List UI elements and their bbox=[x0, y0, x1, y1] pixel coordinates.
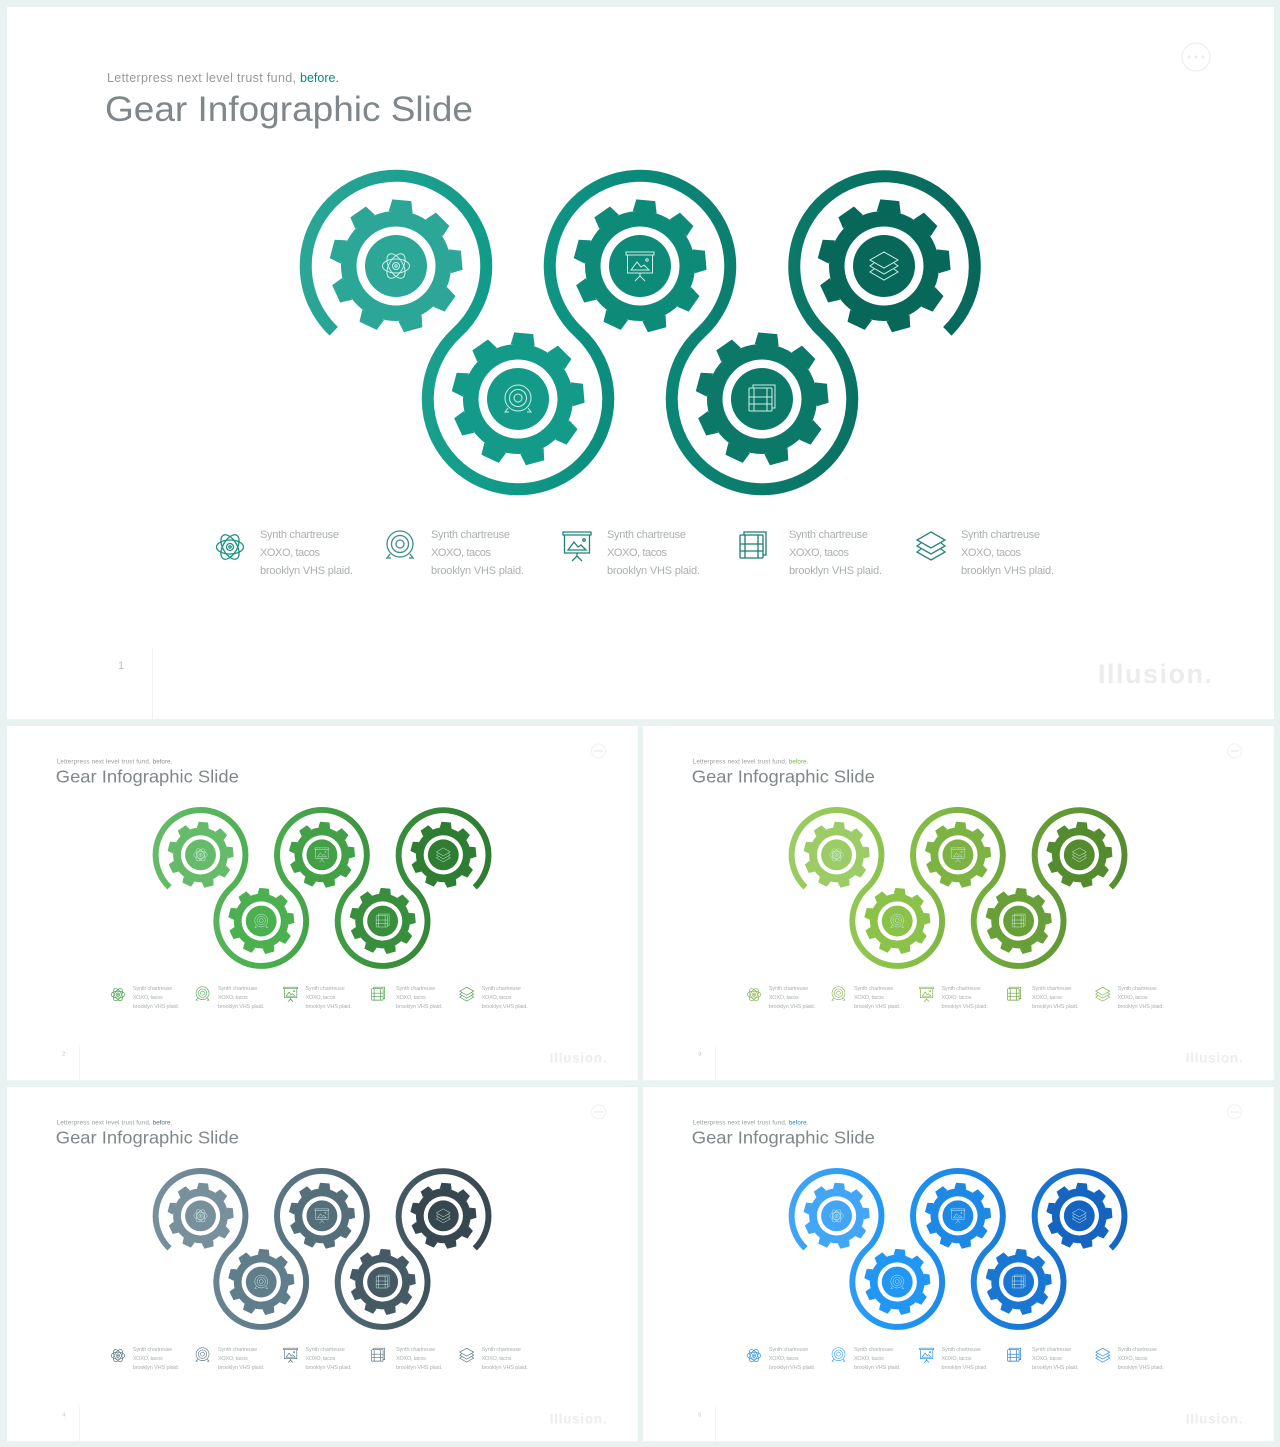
legend item 5: brooklyn VHS plaid. bbox=[482, 1004, 528, 1010]
legend item 2: brooklyn VHS plaid. bbox=[854, 1365, 901, 1371]
gear diagram bbox=[306, 176, 975, 489]
footer rule bbox=[714, 1406, 717, 1441]
legend item 5: XOXO, tacos bbox=[1118, 995, 1148, 1001]
legend item 2: XOXO, tacos bbox=[218, 995, 248, 1001]
legend item 2 bbox=[832, 1347, 901, 1371]
legend item 3: brooklyn VHS plaid. bbox=[942, 1365, 988, 1371]
legend item 3: XOXO, tacos bbox=[607, 547, 668, 559]
brand wordmark: Illusion. bbox=[1098, 659, 1212, 689]
slide 5: blue bbox=[643, 1087, 1274, 1441]
legend item 1: XOXO, tacos bbox=[260, 547, 320, 559]
gear 1: atom bbox=[329, 199, 463, 333]
gear 1: atom bbox=[803, 1183, 870, 1249]
legend bbox=[111, 1347, 528, 1371]
legend item 4: XOXO, tacos bbox=[789, 547, 850, 559]
legend item 1: Synth chartreuse bbox=[260, 529, 339, 541]
slide background bbox=[643, 1087, 1274, 1441]
legend item 5: brooklyn VHS plaid. bbox=[1118, 1004, 1164, 1010]
subtitle: before. bbox=[153, 758, 172, 765]
gear 4: film bbox=[695, 332, 829, 466]
legend item 5: Synth chartreuse bbox=[482, 1347, 521, 1353]
legend item 5: XOXO, tacos bbox=[1118, 1356, 1148, 1362]
gear 4: film bbox=[349, 1249, 416, 1315]
gear 2: target bbox=[864, 1249, 930, 1315]
legend item 4: Synth chartreuse bbox=[396, 1347, 435, 1353]
title: Gear Infographic Slide bbox=[56, 1128, 239, 1148]
legend item 2 bbox=[832, 986, 901, 1010]
gear 3: presentation bbox=[289, 822, 355, 888]
legend item 1 bbox=[111, 1347, 180, 1371]
gear 3: presentation bbox=[289, 1183, 355, 1249]
title: Gear Infographic Slide bbox=[692, 767, 875, 787]
serpentine track bbox=[792, 1171, 1124, 1327]
footer rule bbox=[78, 1406, 81, 1441]
legend item 2: Synth chartreuse bbox=[218, 986, 257, 992]
legend item 2: XOXO, tacos bbox=[854, 995, 884, 1001]
gear 4: film bbox=[985, 888, 1052, 954]
subtitle: Letterpress next level trust fund, bbox=[693, 1119, 787, 1126]
gear 3: presentation bbox=[925, 822, 991, 888]
legend item 1 bbox=[747, 1347, 816, 1371]
legend item 2 bbox=[196, 1347, 265, 1371]
legend item 2: Synth chartreuse bbox=[218, 1347, 257, 1353]
subtitle: Letterpress next level trust fund, bbox=[57, 758, 151, 765]
legend item 1: Synth chartreuse bbox=[769, 986, 808, 992]
slide 1: teal bbox=[7, 7, 1274, 719]
legend item 4: XOXO, tacos bbox=[1032, 995, 1062, 1001]
legend item 4: brooklyn VHS plaid. bbox=[1032, 1004, 1079, 1010]
legend item 4: XOXO, tacos bbox=[396, 995, 426, 1001]
slide background bbox=[7, 1087, 638, 1441]
legend item 4: brooklyn VHS plaid. bbox=[789, 565, 882, 577]
legend item 2 bbox=[196, 986, 265, 1010]
page number: 5 bbox=[698, 1412, 701, 1418]
serpentine track bbox=[156, 810, 488, 966]
subtitle: Letterpress next level trust fund, bbox=[693, 758, 787, 765]
legend item 3 bbox=[284, 986, 352, 1010]
legend bbox=[216, 529, 1054, 577]
legend item 1: brooklyn VHS plaid. bbox=[769, 1365, 816, 1371]
menu icon bbox=[592, 1105, 605, 1119]
slide 2: green bbox=[7, 726, 638, 1080]
legend bbox=[111, 986, 528, 1010]
legend item 5: Synth chartreuse bbox=[1118, 986, 1157, 992]
legend item 1: XOXO, tacos bbox=[133, 1356, 163, 1362]
page number: 2 bbox=[62, 1051, 65, 1057]
brand wordmark: Illusion. bbox=[1186, 1050, 1242, 1065]
serpentine track bbox=[306, 176, 975, 489]
legend item 2: brooklyn VHS plaid. bbox=[431, 565, 524, 577]
legend item 3 bbox=[920, 986, 988, 1010]
legend item 4 bbox=[372, 986, 443, 1010]
gear diagram bbox=[792, 1171, 1124, 1327]
gear 4: film bbox=[349, 888, 416, 954]
gear 4: film bbox=[985, 1249, 1052, 1315]
legend item 5: brooklyn VHS plaid. bbox=[1118, 1365, 1164, 1371]
menu icon bbox=[1182, 43, 1210, 71]
legend item 5 bbox=[460, 986, 528, 1010]
legend item 4: brooklyn VHS plaid. bbox=[396, 1365, 443, 1371]
legend item 3: brooklyn VHS plaid. bbox=[306, 1365, 352, 1371]
legend item 3: XOXO, tacos bbox=[306, 995, 336, 1001]
legend item 3: brooklyn VHS plaid. bbox=[942, 1004, 988, 1010]
gear 5: layers bbox=[1046, 822, 1113, 888]
legend item 2: brooklyn VHS plaid. bbox=[854, 1004, 901, 1010]
legend item 5 bbox=[1096, 1347, 1164, 1371]
page number: 4 bbox=[62, 1412, 65, 1418]
brand wordmark: Illusion. bbox=[550, 1411, 606, 1426]
gear diagram bbox=[792, 810, 1124, 966]
legend item 5: Synth chartreuse bbox=[961, 529, 1040, 541]
serpentine track bbox=[792, 810, 1124, 966]
gear 2: target bbox=[864, 888, 930, 954]
legend item 1: XOXO, tacos bbox=[769, 995, 799, 1001]
legend item 4: Synth chartreuse bbox=[396, 986, 435, 992]
legend item 1: brooklyn VHS plaid. bbox=[133, 1365, 180, 1371]
title: Gear Infographic Slide bbox=[692, 1128, 875, 1148]
legend item 4: Synth chartreuse bbox=[1032, 1347, 1071, 1353]
gear 5: layers bbox=[410, 822, 477, 888]
legend item 4: brooklyn VHS plaid. bbox=[1032, 1365, 1079, 1371]
subtitle: Letterpress next level trust fund, bbox=[57, 1119, 151, 1126]
legend item 3: brooklyn VHS plaid. bbox=[306, 1004, 352, 1010]
legend item 2: Synth chartreuse bbox=[854, 1347, 893, 1353]
legend item 1: brooklyn VHS plaid. bbox=[769, 1004, 816, 1010]
subtitle: before. bbox=[789, 1119, 808, 1126]
gear diagram bbox=[156, 810, 488, 966]
legend item 2 bbox=[387, 529, 524, 577]
subtitle: before. bbox=[789, 758, 808, 765]
gear 1: atom bbox=[167, 822, 234, 888]
legend item 5: XOXO, tacos bbox=[961, 547, 1022, 559]
legend item 1: Synth chartreuse bbox=[769, 1347, 808, 1353]
legend item 3: Synth chartreuse bbox=[306, 1347, 345, 1353]
slide 3: light green bbox=[643, 726, 1274, 1080]
legend item 3: XOXO, tacos bbox=[942, 995, 972, 1001]
brand wordmark: Illusion. bbox=[1186, 1411, 1242, 1426]
legend item 4 bbox=[740, 529, 882, 577]
brand wordmark: Illusion. bbox=[550, 1050, 606, 1065]
legend item 5: brooklyn VHS plaid. bbox=[482, 1365, 528, 1371]
menu icon bbox=[1228, 744, 1241, 758]
title: Gear Infographic Slide bbox=[105, 90, 473, 129]
legend item 1: Synth chartreuse bbox=[133, 1347, 172, 1353]
legend item 2: XOXO, tacos bbox=[218, 1356, 248, 1362]
legend item 4: XOXO, tacos bbox=[1032, 1356, 1062, 1362]
legend item 1 bbox=[216, 529, 353, 577]
legend item 5 bbox=[1096, 986, 1164, 1010]
footer rule bbox=[714, 1045, 717, 1080]
gear 2: target bbox=[451, 332, 585, 466]
legend item 4 bbox=[372, 1347, 443, 1371]
legend item 2: brooklyn VHS plaid. bbox=[218, 1004, 265, 1010]
gear 3: presentation bbox=[573, 199, 707, 333]
legend item 1: XOXO, tacos bbox=[133, 995, 163, 1001]
legend item 4: brooklyn VHS plaid. bbox=[396, 1004, 443, 1010]
menu icon bbox=[1228, 1105, 1241, 1119]
legend item 2: XOXO, tacos bbox=[854, 1356, 884, 1362]
legend item 1: brooklyn VHS plaid. bbox=[260, 565, 353, 577]
gear 2: target bbox=[228, 1249, 294, 1315]
legend item 2: Synth chartreuse bbox=[854, 986, 893, 992]
legend item 5: XOXO, tacos bbox=[482, 1356, 512, 1362]
gear 3: presentation bbox=[925, 1183, 991, 1249]
slide 4: slate bbox=[7, 1087, 638, 1441]
legend bbox=[747, 1347, 1164, 1371]
legend item 3: Synth chartreuse bbox=[942, 986, 981, 992]
legend item 2: Synth chartreuse bbox=[431, 529, 510, 541]
legend item 3 bbox=[563, 529, 700, 577]
legend item 1 bbox=[747, 986, 816, 1010]
legend item 1 bbox=[111, 986, 180, 1010]
gear 5: layers bbox=[817, 199, 951, 333]
slide background bbox=[643, 726, 1274, 1080]
legend item 4: XOXO, tacos bbox=[396, 1356, 426, 1362]
page number: 3 bbox=[698, 1051, 701, 1057]
page number: 1 bbox=[118, 660, 124, 672]
legend item 3: Synth chartreuse bbox=[942, 1347, 981, 1353]
gear 1: atom bbox=[803, 822, 870, 888]
legend item 3: Synth chartreuse bbox=[607, 529, 686, 541]
legend item 5: Synth chartreuse bbox=[482, 986, 521, 992]
subtitle: before. bbox=[300, 71, 339, 85]
legend item 4: Synth chartreuse bbox=[1032, 986, 1071, 992]
legend item 1: brooklyn VHS plaid. bbox=[133, 1004, 180, 1010]
legend item 1: XOXO, tacos bbox=[769, 1356, 799, 1362]
subtitle: Letterpress next level trust fund, bbox=[107, 71, 296, 85]
slide background bbox=[7, 726, 638, 1080]
legend item 2: brooklyn VHS plaid. bbox=[218, 1365, 265, 1371]
gear 5: layers bbox=[1046, 1183, 1113, 1249]
legend item 1: Synth chartreuse bbox=[133, 986, 172, 992]
legend item 5: brooklyn VHS plaid. bbox=[961, 565, 1054, 577]
legend item 5 bbox=[917, 529, 1054, 577]
title: Gear Infographic Slide bbox=[56, 767, 239, 787]
legend item 5: XOXO, tacos bbox=[482, 995, 512, 1001]
gear diagram bbox=[156, 1171, 488, 1327]
legend item 5: Synth chartreuse bbox=[1118, 1347, 1157, 1353]
gear 1: atom bbox=[167, 1183, 234, 1249]
gear 2: target bbox=[228, 888, 294, 954]
legend item 3: XOXO, tacos bbox=[942, 1356, 972, 1362]
legend item 4: Synth chartreuse bbox=[789, 529, 868, 541]
slide background bbox=[7, 7, 1274, 719]
legend item 3 bbox=[284, 1347, 352, 1371]
legend item 3: XOXO, tacos bbox=[306, 1356, 336, 1362]
footer rule bbox=[78, 1045, 81, 1080]
legend item 3: Synth chartreuse bbox=[306, 986, 345, 992]
legend item 3: brooklyn VHS plaid. bbox=[607, 565, 700, 577]
legend item 3 bbox=[920, 1347, 988, 1371]
subtitle: before. bbox=[153, 1119, 172, 1126]
legend item 4 bbox=[1008, 986, 1079, 1010]
menu icon bbox=[592, 744, 605, 758]
legend item 4 bbox=[1008, 1347, 1079, 1371]
serpentine track bbox=[156, 1171, 488, 1327]
legend item 5 bbox=[460, 1347, 528, 1371]
gear 5: layers bbox=[410, 1183, 477, 1249]
legend item 2: XOXO, tacos bbox=[431, 547, 492, 559]
footer rule bbox=[152, 648, 153, 719]
legend bbox=[747, 986, 1164, 1010]
